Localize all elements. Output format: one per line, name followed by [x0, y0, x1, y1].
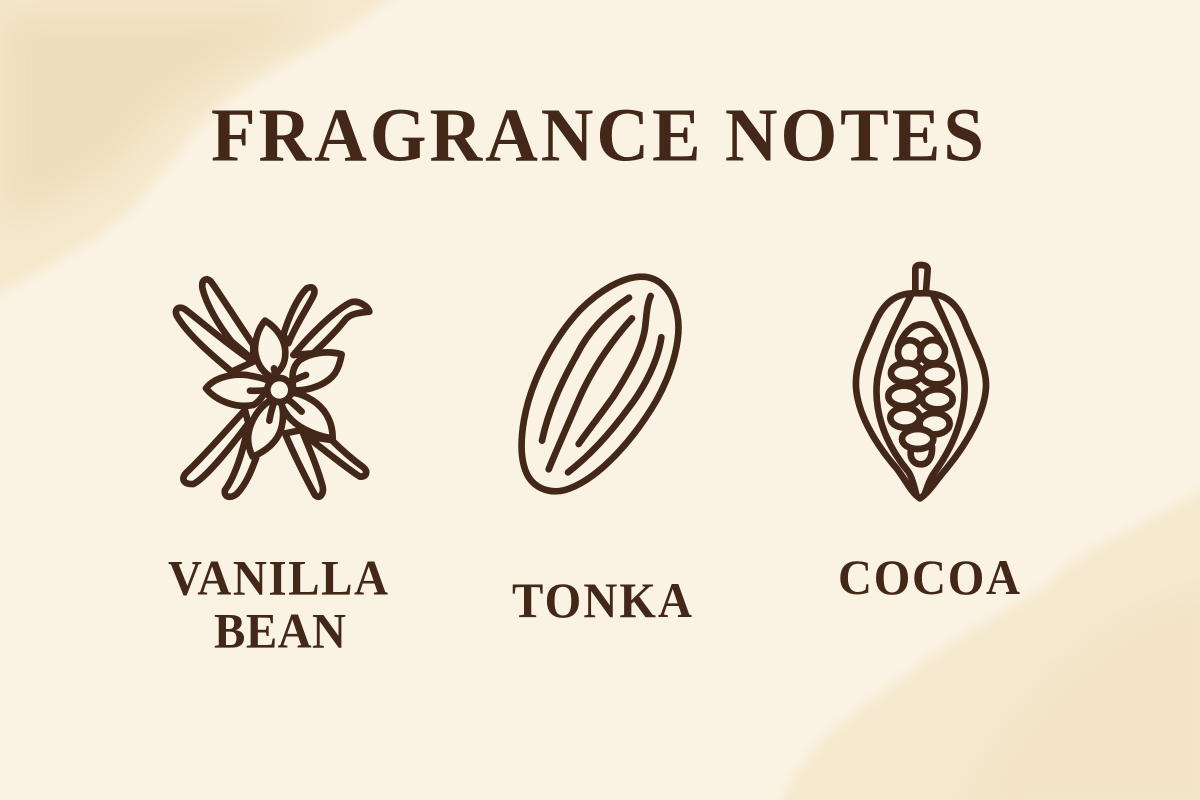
label: vanilla bean: BEAN	[214, 604, 346, 659]
icon: vanilla bean flower	[176, 279, 369, 497]
label: vanilla bean	[168, 551, 388, 659]
icon: cocoa pod	[856, 265, 986, 498]
title: FRAGRANCE NOTES	[211, 93, 984, 178]
label: tonka: TONKA	[512, 574, 692, 628]
icon: tonka bean	[522, 277, 678, 491]
label: cocoa: COCOA	[838, 551, 1020, 605]
label: vanilla bean: VANILLA	[168, 551, 388, 606]
